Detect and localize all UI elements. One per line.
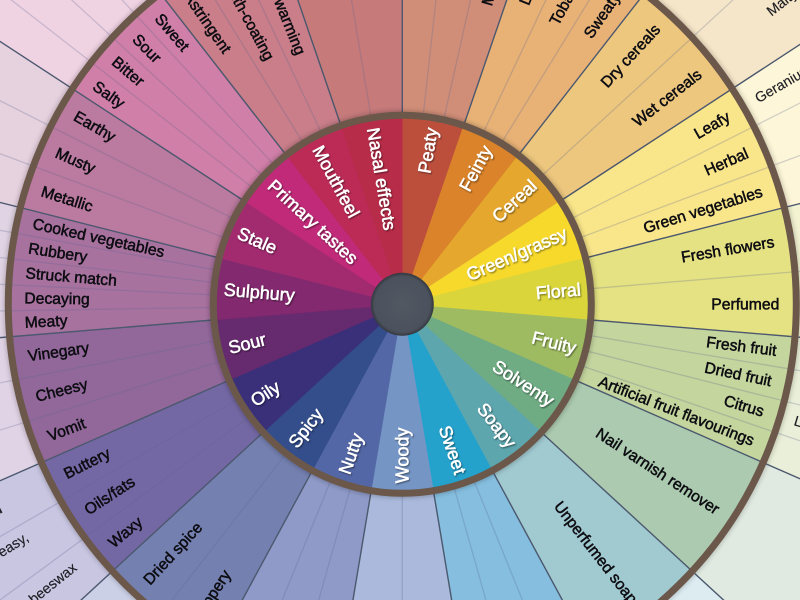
label: Cheesy: Cheesy bbox=[34, 376, 90, 406]
middle wedge: woody bbox=[276, 304, 467, 600]
label: Solventy: Solventy bbox=[489, 356, 558, 411]
label: Nutty: Nutty bbox=[335, 431, 367, 477]
middle wedge: fruity bbox=[392, 304, 795, 464]
middle wedge: stale bbox=[20, 84, 434, 304]
label: Citrus: Citrus bbox=[722, 393, 766, 421]
outer wedge: sulphury bbox=[0, 139, 402, 346]
inner wedge: mouthfeel bbox=[287, 118, 450, 304]
label: Rubbery: Rubbery bbox=[27, 241, 88, 266]
inner wedge: green/grassy bbox=[402, 201, 593, 355]
label: Salty: Salty bbox=[89, 78, 128, 112]
inner ring shadow bbox=[213, 115, 591, 493]
outer wedge: peaty bbox=[402, 0, 568, 304]
inner wedge: woody bbox=[342, 304, 433, 500]
label: Primary tastes: Primary tastes bbox=[264, 176, 362, 268]
middle wedge: floral bbox=[402, 208, 800, 428]
label: Metallic: Metallic bbox=[39, 184, 95, 216]
middle wedge: cereal bbox=[402, 0, 745, 383]
label: Fresh fruit: Fresh fruit bbox=[705, 334, 778, 360]
outer wedge: cereal bbox=[402, 0, 800, 406]
outer wedge: woody bbox=[239, 304, 486, 600]
label: Dried fruit: Dried fruit bbox=[703, 360, 774, 390]
middle wedge: solventy bbox=[351, 304, 763, 580]
label: Feinty: Feinty bbox=[455, 142, 496, 195]
inner ring bbox=[213, 115, 591, 493]
inner wedge: feinty bbox=[402, 126, 521, 324]
label: Struck match: Struck match bbox=[25, 265, 117, 290]
outer wedge: spicy bbox=[14, 225, 402, 600]
middle wedge: oily bbox=[26, 210, 402, 571]
label: Dried spice: Dried spice bbox=[141, 519, 206, 589]
label: Fresh flowers: Fresh flowers bbox=[680, 234, 776, 266]
label: Dry cereals: Dry cereals bbox=[598, 21, 664, 91]
inner wheel: flavour family wedges bbox=[206, 107, 600, 500]
inner wedge: stale bbox=[220, 199, 417, 304]
outer wedge: sour bbox=[0, 153, 402, 509]
label: Sweet: Sweet bbox=[151, 11, 193, 56]
label: Wet cereals: Wet cereals bbox=[630, 66, 705, 131]
label: Vomit: Vomit bbox=[45, 415, 89, 445]
label: Decaying: Decaying bbox=[24, 290, 90, 308]
label: Perfumed: Perfumed bbox=[711, 296, 779, 313]
inner wedge: oily bbox=[223, 259, 402, 432]
label: Woody: Woody bbox=[392, 428, 412, 483]
label: Spicy: Spicy bbox=[284, 405, 327, 452]
label: Meaty: Meaty bbox=[24, 313, 68, 332]
middle wedge: sour bbox=[0, 187, 402, 463]
label: Sulphury: Sulphury bbox=[223, 280, 296, 305]
label: Cooked vegetables: Cooked vegetables bbox=[31, 216, 166, 261]
inner wedge: solventy bbox=[378, 304, 574, 436]
outer wedge: oily bbox=[0, 182, 402, 600]
middle wedge: nutty bbox=[211, 283, 402, 600]
middle wedge: peaty bbox=[402, 0, 530, 304]
label: Musty: Musty bbox=[53, 145, 98, 177]
label: Sweet: Sweet bbox=[435, 423, 470, 477]
label: Soapy: Soapy bbox=[473, 399, 520, 452]
centre hub bbox=[371, 273, 434, 336]
label: Earthy: Earthy bbox=[70, 108, 118, 146]
inner wedge: floral bbox=[402, 258, 600, 363]
inner wedge: nutty bbox=[311, 294, 402, 490]
inner wedge: sulphury bbox=[210, 244, 402, 320]
outer wedge: nutty bbox=[155, 277, 402, 600]
label: Sour: Sour bbox=[226, 329, 268, 358]
outer wedge: solventy bbox=[336, 304, 800, 600]
label: Nail varnish remover: Nail varnish remover bbox=[592, 425, 722, 518]
outer wedge: sweet bbox=[257, 304, 645, 600]
label: Stale: Stale bbox=[234, 223, 280, 258]
outer wedge: soapy bbox=[290, 304, 778, 600]
outer wedge: mouthfeel bbox=[89, 0, 533, 304]
label: Nasal effects: Nasal effects bbox=[363, 126, 400, 232]
label: Bitter: Bitter bbox=[108, 54, 147, 90]
label: Sour: Sour bbox=[129, 31, 164, 67]
outer wedge: fruity bbox=[389, 304, 800, 511]
label: Green/grassy: Green/grassy bbox=[463, 223, 570, 285]
inner wedge: peaty bbox=[402, 116, 463, 304]
inner wedge: soapy bbox=[361, 304, 541, 477]
label: Vinegary: Vinegary bbox=[27, 340, 90, 365]
label: Oils/fats: Oils/fats bbox=[82, 473, 138, 519]
label: Mouthfeel: Mouthfeel bbox=[308, 142, 364, 221]
label: Waxy: Waxy bbox=[106, 514, 146, 552]
label: Buttery: Buttery bbox=[61, 445, 113, 483]
outer wedge: primary tastes bbox=[0, 0, 493, 304]
middle wedge: sweet bbox=[290, 304, 590, 600]
label: Artificial fruit flavourings: Artificial fruit flavourings bbox=[596, 374, 757, 450]
inner wedge: sweet bbox=[349, 304, 492, 499]
middle wedge: primary tastes bbox=[72, 0, 472, 304]
middle wedge: green/grassy bbox=[402, 89, 800, 411]
outer wedge: floral bbox=[402, 179, 800, 465]
outer wedge: nasal effects bbox=[237, 0, 559, 304]
label: Oily: Oily bbox=[247, 377, 284, 411]
middle wedge: sulphury bbox=[0, 177, 402, 337]
inner wedge: spicy bbox=[259, 275, 402, 470]
outer wedge: stale bbox=[0, 19, 443, 304]
label: Cereal: Cereal bbox=[488, 176, 541, 226]
outer wedge: green/grassy bbox=[402, 25, 800, 443]
middle wedge: soapy bbox=[316, 304, 692, 600]
inner wedge: sour bbox=[206, 248, 402, 380]
inner wedge: primary tastes bbox=[245, 150, 436, 304]
label: Floral: Floral bbox=[535, 280, 582, 303]
outer wedge: feinty bbox=[402, 0, 725, 358]
middle wedge: mouthfeel bbox=[160, 0, 503, 304]
label: Fruity: Fruity bbox=[530, 327, 578, 358]
label: Peaty: Peaty bbox=[414, 126, 442, 175]
label: Herbal: Herbal bbox=[702, 145, 751, 180]
inner wedge: nasal effects bbox=[341, 107, 460, 304]
middle wedge: feinty bbox=[402, 0, 651, 346]
middle wedge: nasal effects bbox=[274, 0, 523, 304]
label: Leafy: Leafy bbox=[692, 109, 733, 143]
inner wedge: fruity bbox=[397, 304, 590, 381]
inner wedge: cereal bbox=[402, 156, 566, 342]
middle wedge: spicy bbox=[102, 243, 402, 600]
label: Green vegetables: Green vegetables bbox=[641, 184, 765, 237]
inner wheel labels bbox=[223, 126, 582, 483]
